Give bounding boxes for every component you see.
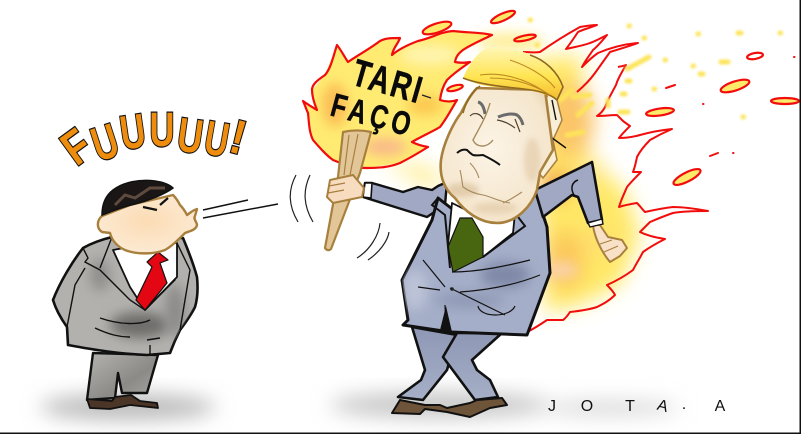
flame: right outline tongues bbox=[523, 25, 708, 331]
motion lines around the torch bbox=[290, 175, 389, 260]
flying embers bbox=[421, 9, 799, 188]
signature: A bbox=[655, 397, 670, 416]
signature: O bbox=[581, 398, 593, 415]
signature: . bbox=[682, 396, 686, 413]
signature: J bbox=[548, 398, 556, 415]
man: eye and brow bbox=[143, 198, 168, 210]
trump figure bbox=[327, 48, 627, 417]
onomatopoeia: FUUUUU!: U bbox=[201, 110, 233, 167]
trump: arm with cuff bbox=[363, 182, 447, 217]
flame: left fire behind the torch bbox=[303, 31, 492, 168]
blow lines bbox=[203, 200, 278, 218]
onomatopoeia: FUUUUU!: ! bbox=[224, 110, 252, 165]
trump: green tie bbox=[448, 218, 483, 272]
fire glow behind the figure bbox=[380, 32, 640, 312]
signature: T bbox=[625, 398, 635, 415]
trump: other hand bbox=[593, 225, 627, 262]
man: hair bbox=[102, 180, 173, 215]
onomatopoeia: FUUUUU! bbox=[52, 102, 252, 176]
trump: side hair and ear bbox=[538, 85, 566, 178]
trump: raised arm bbox=[535, 162, 603, 227]
onomatopoeia: FUUUUU!: F bbox=[52, 119, 102, 176]
onomatopoeia: FUUUUU!: U bbox=[85, 113, 125, 172]
signature bbox=[548, 396, 726, 416]
man: shirt bbox=[113, 243, 177, 310]
trump: golden hair bbox=[463, 48, 563, 113]
onomatopoeia: FUUUUU!: U bbox=[174, 107, 206, 164]
trump: right leg bbox=[443, 333, 502, 400]
man: red tie bbox=[136, 252, 168, 310]
yellow sparks bbox=[530, 20, 780, 135]
tarifaço lettering: FAÇO bbox=[327, 88, 419, 145]
trump: right lapel bbox=[432, 198, 525, 268]
trump: pout bbox=[457, 150, 500, 165]
trump: hand gripping torch bbox=[327, 175, 364, 203]
man: face bbox=[98, 195, 197, 253]
small man in grey suit bbox=[53, 180, 198, 409]
red sparks bbox=[666, 57, 794, 156]
onomatopoeia: FUUUUU!: U bbox=[117, 103, 149, 160]
onomatopoeia: FUUUUU!: U bbox=[150, 102, 174, 156]
trump: nose bbox=[473, 103, 493, 146]
torch bbox=[325, 130, 371, 250]
trump: suit jacket bbox=[402, 190, 550, 335]
trump: face bbox=[441, 88, 553, 223]
ground shadows bbox=[40, 392, 680, 420]
man: legs bbox=[87, 353, 158, 400]
trump: left leg bbox=[398, 327, 457, 400]
trump: shoes bbox=[392, 398, 507, 417]
trump: shirt bbox=[448, 203, 515, 257]
signature: A bbox=[715, 398, 726, 415]
hyphen bbox=[422, 95, 431, 98]
man: shoes bbox=[87, 395, 158, 409]
tarifaço lettering: TARI bbox=[347, 52, 429, 113]
man: suit jacket bbox=[53, 237, 198, 355]
tarifaço lettering bbox=[327, 52, 429, 145]
trump: brows and eyes bbox=[478, 102, 523, 125]
